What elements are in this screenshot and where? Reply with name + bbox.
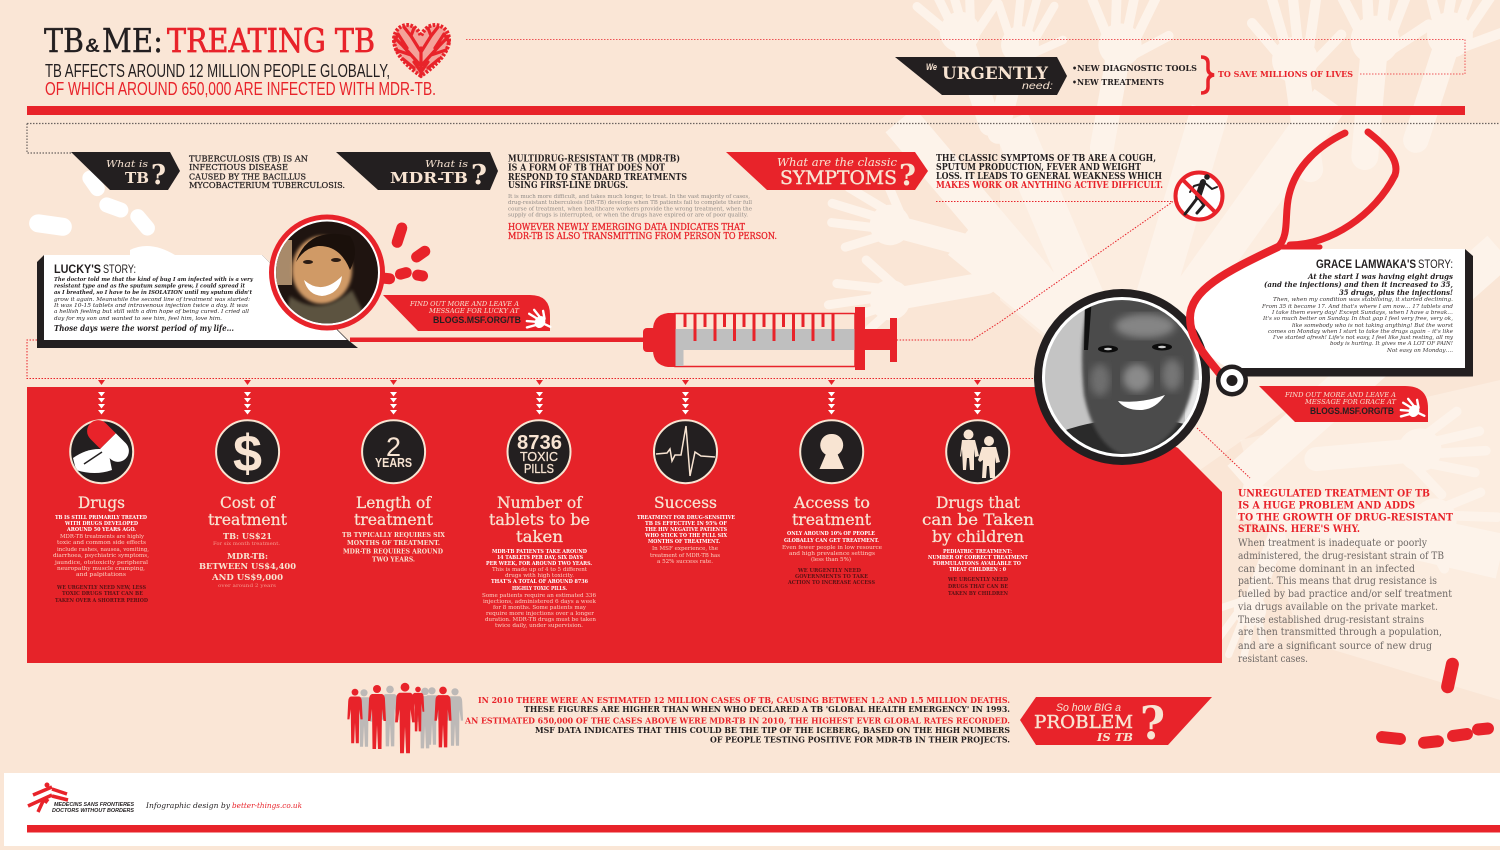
global statistics text: IN 2010 THERE WERE AN ESTIMATED 12 MILLION CASES OF TB, CAUSING BETWEEN 1.2 AND 1.5 MILLION DEATHS. — [478, 696, 1010, 706]
column: number of tablets: duration. MDR-TB drugs must be taken — [485, 617, 596, 623]
column: drugs for children: Drugs that — [936, 493, 1021, 512]
syringe — [643, 307, 897, 370]
column: cost of treatment: BETWEEN US$4,400 — [199, 562, 296, 572]
column: access to treatment — [782, 420, 882, 586]
unregulated treatment text: and are a significant source of new drug — [1238, 640, 1432, 652]
icon: 2 years: 2 — [386, 432, 401, 462]
column: drugs: neuropathy muscle cramping, — [57, 566, 145, 572]
column: drugs: MDR-TB treatments are highly — [60, 534, 145, 540]
column: number of tablets: PER WEEK, FOR AROUND TWO YEARS. — [486, 561, 592, 567]
title: TB — [44, 21, 84, 60]
how big a problem badge: ? — [1140, 696, 1165, 750]
what is TB text: MYCOBACTERIUM TUBERCULOSIS. — [189, 181, 345, 191]
subtitle — [45, 61, 436, 99]
top red rule — [27, 106, 1465, 115]
bottom red pills — [1375, 657, 1495, 749]
unregulated treatment text: When treatment is inadequate or poorly — [1238, 537, 1427, 549]
icon: hand — [524, 306, 555, 336]
column: number of tablets: MDR-TB PATIENTS TAKE AROUND — [492, 549, 587, 555]
column: number of tablets: HIGHLY TOXIC PILLS. — [512, 586, 567, 592]
footer panel: DOCTORS WITHOUT BORDERS — [52, 808, 134, 814]
column: success: WHO STICK TO THE FULL SIX — [644, 533, 728, 539]
stethoscope — [1190, 132, 1396, 396]
column: length of treatment: TWO YEARS. — [372, 556, 415, 564]
column: drugs: AROUND 50 YEARS AGO. — [66, 527, 136, 533]
symptoms badge: ? — [899, 158, 916, 192]
global statistics text: MSF DATA INDICATES THAT THIS COULD BE THE TIP OF THE ICEBERG, BASED ON THE HIGH NUMBERS — [535, 726, 1010, 736]
people silhouettes — [347, 683, 463, 753]
icon: branching heart — [394, 25, 449, 76]
Lucky link button — [383, 295, 555, 336]
what is MDR-TB text: IS A FORM OF TB THAT DOES NOT — [508, 164, 665, 174]
Lucky link button: MESSAGE FOR LUCKY AT — [428, 307, 520, 315]
unregulated treatment text: patient. This means that drug resistance is — [1238, 575, 1437, 587]
Lucky link button: FIND OUT MORE AND LEAVE A — [409, 300, 519, 308]
subtitle: TB AFFECTS AROUND 12 MILLION PEOPLE GLOBALLY, — [45, 61, 390, 81]
column: length of treatment: MDR-TB REQUIRES AROUND — [343, 548, 443, 556]
icon: 8736 toxic pills: 8736 — [517, 432, 562, 454]
arrow chains — [98, 380, 981, 414]
urgently need callout: •NEW DIAGNOSTIC TOOLS — [1072, 64, 1197, 74]
unregulated treatment text: via drugs available on the private market. — [1237, 601, 1438, 613]
column: access to treatment: treatment — [792, 510, 872, 529]
symptoms text: THE CLASSIC SYMPTOMS OF TB ARE A COUGH, — [936, 154, 1156, 164]
red pills — [379, 221, 432, 285]
column: number of tablets: injections, administered 6 days a week — [483, 599, 597, 605]
column: cost of treatment: Cost of — [220, 493, 276, 512]
unregulated treatment text — [1237, 488, 1454, 665]
how big a problem badge: IS TB — [1096, 731, 1133, 744]
Grace link button — [1259, 386, 1429, 425]
Lucky link button: BLOGS.MSF.ORG/TB — [433, 315, 521, 325]
what is TB text: CAUSED BY THE BACILLUS — [189, 172, 306, 182]
Lucky's story panel: LUCKY'S — [54, 262, 101, 276]
column: drugs for children: NUMBER OF CORRECT TREATMENT — [928, 555, 1029, 561]
urgently need callout: URGENTLY — [942, 64, 1049, 84]
what is MDR-TB badge — [336, 152, 498, 191]
Lucky's story panel: Those days were the worst period of my life... — [54, 323, 234, 333]
icon: pills — [70, 416, 133, 483]
what is MDR-TB text — [508, 154, 777, 242]
column: number of tablets — [482, 420, 597, 629]
urgently need callout — [895, 57, 1353, 95]
column: access to treatment: GOVERNMENTS TO TAKE — [795, 574, 868, 580]
what is MDR-TB text: MULTIDRUG-RESISTANT TB (MDR-TB) — [508, 154, 680, 164]
Grace's story panel: STORY: — [1418, 257, 1453, 271]
icon: MSF logo — [28, 782, 68, 812]
Grace's story panel: body is hurting. It gives me A LOT OF PAIN! — [1330, 341, 1453, 347]
what is TB badge — [71, 152, 180, 191]
icon: chestpiece — [1216, 364, 1248, 396]
background hands pattern — [822, 0, 1500, 700]
Grace's story panel: Not easy on Monday…. — [1386, 348, 1453, 354]
column: cost of treatment: TB: US$21 — [223, 532, 272, 542]
column: number of tablets: require more injections over a longer — [486, 611, 594, 617]
Lucky's story panel: The doctor told me that the kind of bug I am infected with is a very — [54, 277, 254, 283]
footer panel — [4, 773, 1500, 846]
title: & — [85, 36, 100, 57]
column: number of tablets: THAT'S A TOTAL OF AROUND 8736 — [491, 579, 588, 585]
Lucky's story panel: resistant type and as the sputum sample grew, I could spread it — [54, 284, 245, 290]
what is MDR-TB text: drug-resistant tuberculosis (DR-TB) develops when TB patients fail to complete their full — [508, 199, 752, 206]
Grace's story panel: Then, when my condition was stabilising, it started declining. — [1273, 297, 1453, 303]
column: drugs for children: PEDIATRIC TREATMENT: — [943, 549, 1012, 555]
what is MDR-TB badge: ? — [471, 160, 487, 191]
column: access to treatment: Access to — [793, 493, 870, 512]
column: success: Success — [654, 493, 717, 512]
column: access to treatment: GLOBALLY CAN GET TREATMENT. — [784, 538, 879, 544]
Lucky's story panel: as I breathed, so I have to be in ISOLATION until my sputum didn't — [54, 290, 252, 296]
column: success: In MSF experience, the — [652, 546, 718, 552]
icon: 8736 toxic pills: TOXIC — [520, 449, 558, 464]
what is TB text: TUBERCULOSIS (TB) IS AN — [189, 154, 309, 164]
icon: dollar: $ — [233, 425, 262, 483]
how big a problem badge: So how BIG a — [1056, 702, 1121, 714]
column: drugs: WE URGENTLY NEED NEW, LESS — [56, 585, 146, 591]
column: number of tablets: twice daily, under supervision. — [495, 623, 583, 629]
dotted connector lines — [27, 40, 1500, 478]
what is TB badge: ? — [151, 160, 166, 191]
column: access to treatment: and high prevalence settings — [789, 551, 875, 557]
column: drugs for children: FORMULATIONS AVAILABLE TO — [933, 561, 1021, 567]
symptoms badge: SYMPTOMS — [780, 167, 897, 189]
what is MDR-TB text: MDR-TB IS ALSO TRANSMITTING FROM PERSON TO PERSON. — [508, 232, 777, 242]
column: access to treatment: (less than 5%) — [811, 556, 851, 563]
column: access to treatment: Even fewer people in low resource — [782, 545, 882, 551]
column: number of tablets: Number of — [497, 493, 583, 512]
icon: no running — [1176, 172, 1222, 220]
column: length of treatment — [342, 420, 446, 564]
symptoms badge: What are the classic — [777, 156, 897, 169]
what is TB text: INFECTIOUS DISEASE — [189, 163, 288, 173]
column: drugs for children: by children — [932, 527, 1024, 546]
column: drugs for children: WE URGENTLY NEED — [947, 577, 1008, 583]
column: access to treatment: WE URGENTLY NEED — [797, 568, 861, 574]
Grace's story panel: (and the injections) and then it increased to 35, — [1264, 280, 1453, 289]
column: cost of treatment: For six month treatment. — [213, 541, 280, 547]
unregulated treatment text: administered, the drug-resistant strain of TB — [1238, 550, 1444, 562]
footer panel: Infographic design by — [145, 802, 231, 810]
icon: keyhole — [800, 420, 863, 483]
what is MDR-TB text: course of treatment, when healthcare workers provide the wrong treatment, when the — [508, 206, 752, 212]
column: drugs: jaundice, ototoxicity peripheral — [54, 560, 148, 566]
icon: 8736 toxic pills — [508, 420, 570, 483]
icon: 8736 toxic pills: PILLS — [524, 461, 554, 476]
Lucky's story panel: day for my son and wanted to see him, feel him, love him. — [54, 316, 222, 322]
unregulated treatment text: resistant cases. — [1238, 653, 1308, 665]
symptoms text — [936, 154, 1163, 191]
column: drugs: diarrhoea, psychiatric symptoms, — [53, 553, 149, 559]
symptoms text: LOSS. IT LEADS TO GENERAL WEAKNESS WHICH — [936, 172, 1162, 182]
column: cost of treatment — [199, 420, 296, 589]
column: drugs: and palpitations — [76, 572, 126, 578]
column: cost of treatment: MDR-TB: — [227, 552, 268, 562]
white pills — [28, 168, 175, 255]
column: number of tablets: taken — [516, 527, 563, 546]
Grace's story panel: It's so much better on Sunday. In that gap I feel very free, very ok, — [1262, 316, 1453, 322]
what is MDR-TB badge: What is — [425, 159, 468, 170]
column: number of tablets: for 8 months. Some patients may — [493, 605, 587, 611]
what is TB text — [189, 154, 345, 191]
Grace link button: BLOGS.MSF.ORG/TB — [1310, 406, 1394, 416]
column: number of tablets: 14 TABLETS PER DAY, SIX DAYS — [497, 555, 583, 561]
column: length of treatment: TB TYPICALLY REQUIRES SIX — [342, 531, 446, 539]
column: drugs: TB IS STILL PRIMARILY TREATED — [55, 515, 147, 521]
Grace link button: FIND OUT MORE AND LEAVE A — [1284, 391, 1396, 399]
unregulated treatment text: IS A HUGE PROBLEM AND ADDS — [1238, 500, 1415, 512]
what is TB badge: What is — [106, 159, 148, 170]
title — [44, 21, 375, 60]
column: cost of treatment: AND US$9,000 — [211, 573, 283, 583]
column: success: THE HIV NEGATIVE PATIENTS — [645, 527, 727, 533]
column: success — [637, 420, 735, 565]
what is MDR-TB text: HOWEVER NEWLY EMERGING DATA INDICATES THAT — [508, 223, 745, 233]
column: drugs for children: can be Taken — [922, 510, 1034, 529]
Grace's story panel: From 35 it became 17. And that's where I am now… 17 tablets and — [1261, 304, 1453, 310]
Lucky's story panel: grow it again. Meanwhile the second line of treatment was started: — [54, 297, 250, 303]
unregulated treatment text: are then transmitted through a population, — [1238, 626, 1442, 638]
global statistics text: AN ESTIMATED 650,000 OF THE CASES ABOVE WERE MDR-TB IN 2010, THE HIGHEST EVER GLOBAL RATES RECORDED. — [464, 716, 1010, 726]
column: length of treatment: treatment — [354, 510, 434, 529]
column: number of tablets: This is made up of 4 to 5 different — [492, 567, 588, 573]
red treatment panel — [27, 387, 1222, 663]
column: access to treatment: ACTION TO INCREASE ACCESS — [787, 580, 875, 586]
icon: children — [946, 420, 1009, 483]
column: success: TREATMENT FOR DRUG-SENSITIVE — [637, 515, 735, 521]
Grace's story panel: 35 drugs, plus the injections! — [1339, 288, 1453, 297]
icon: hand — [1398, 395, 1429, 425]
Grace link button: MESSAGE FOR GRACE AT — [1304, 398, 1397, 406]
what is TB badge: TB — [125, 169, 149, 187]
column: drugs: TAKEN OVER A SHORTER PERIOD — [55, 598, 148, 604]
what is MDR-TB text: USING FIRST-LINE DRUGS. — [508, 181, 628, 191]
global statistics text — [464, 696, 1010, 746]
global statistics text: OF PEOPLE TESTING POSITIVE FOR MDR-TB IN THEIR PROJECTS. — [710, 736, 1010, 746]
Grace's story panel — [1190, 249, 1473, 376]
column: length of treatment: Length of — [356, 493, 432, 512]
icon: heartbeat — [654, 420, 717, 483]
column: number of tablets: Some patients require an estimated 336 — [482, 593, 597, 599]
column: number of tablets: tablets to be — [489, 510, 590, 529]
column: drugs: toxic and common side effects — [57, 540, 146, 546]
Lucky's story panel: a hellish feeling but still with a dim hope of being cured. I cried all — [54, 309, 249, 315]
unregulated treatment text: TO THE GROWTH OF DRUG-RESISTANT — [1238, 512, 1454, 524]
column: number of tablets: drugs with high toxicity. — [505, 573, 574, 579]
column: success: treatment of MDR-TB has — [650, 553, 720, 559]
unregulated treatment text: can become dominant in an infected — [1238, 563, 1415, 575]
column: drugs for children: TREAT CHILDREN : 0 — [949, 567, 1006, 573]
Grace's story panel: At the start I was having eight drugs — [1307, 272, 1454, 281]
urgently need callout: TO SAVE MILLIONS OF LIVES — [1218, 70, 1353, 80]
column: drugs — [53, 416, 149, 604]
what is MDR-TB badge: MDR-TB — [390, 169, 468, 187]
column: length of treatment: MONTHS OF TREATMENT. — [347, 539, 440, 547]
column: drugs: include rashes, nausea, vomiting, — [57, 547, 149, 553]
icon: 2 years: YEARS — [375, 455, 412, 470]
column: access to treatment: ONLY AROUND 10% OF PEOPLE — [787, 531, 875, 537]
urgently need callout: •NEW TREATMENTS — [1072, 78, 1164, 88]
title: ME: — [102, 21, 163, 60]
symptoms badge — [726, 152, 928, 192]
what is MDR-TB text: It is much more difficult, and takes much longer, to treat. In the vast majority of cases, — [508, 194, 750, 200]
unregulated treatment text: These established drug-resistant strains — [1238, 614, 1424, 626]
Lucky's story panel: STORY: — [103, 262, 136, 276]
icon: brace — [1201, 57, 1214, 93]
unregulated treatment text: fuelled by bad practice and/or self treatment — [1238, 588, 1453, 600]
Grace photo — [1034, 289, 1210, 470]
what is MDR-TB text: RESPOND TO STANDARD TREATMENTS — [508, 173, 687, 183]
column: drugs for children: TAKEN BY CHILDREN — [948, 591, 1008, 597]
Grace's story panel: I take them every day! Except Sundays, when I have a break… — [1271, 310, 1453, 316]
column: cost of treatment: over around 2 years — [218, 583, 276, 589]
icon: dollar — [216, 420, 279, 483]
urgently need callout: We — [926, 62, 937, 72]
column: drugs: TOXIC DRUGS THAT CAN BE — [62, 591, 143, 597]
Grace's story panel: comes on Monday when I start to take the drugs again – it's like — [1268, 329, 1454, 335]
Grace's story panel: GRACE LAMWAKA'S — [1316, 257, 1416, 271]
column: drugs for children — [922, 420, 1034, 597]
Lucky photo — [269, 214, 385, 330]
column: drugs for children: DRUGS THAT CAN BE — [948, 584, 1008, 590]
Grace's story panel: like somebody who is not taking anything! But the worst — [1292, 323, 1454, 329]
column: drugs: WITH DRUGS DEVELOPED — [64, 521, 138, 527]
symptoms text: SPUTUM PRODUCTION, FEVER AND WEIGHT — [936, 163, 1141, 173]
how big a problem badge: PROBLEM — [1034, 712, 1133, 733]
what is MDR-TB text: supply of drugs is interrupted, or when the drugs have expired or are of poor quality. — [508, 212, 748, 218]
Lucky's story panel: It was 10-15 tablets and intravenous injection twice a day. It was — [53, 303, 248, 309]
how big a problem badge — [1020, 696, 1212, 750]
icon: 2 years — [362, 420, 425, 483]
title: TREATING TB — [167, 21, 375, 60]
column: cost of treatment: treatment — [208, 510, 288, 529]
column: success: MONTHS OF TREATMENT. — [648, 539, 720, 545]
global statistics text: THESE FIGURES ARE HIGHER THAN WHEN WHO DECLARED A TB 'GLOBAL HEALTH EMERGENCY' IN 1993. — [524, 705, 1010, 715]
footer panel: MEDECINS SANS FRONTIERES — [54, 802, 134, 808]
urgently need callout: need: — [1022, 81, 1053, 92]
column: success: a 52% success rate. — [657, 559, 713, 565]
column: success: TB IS EFFECTIVE IN 95% OF — [645, 521, 727, 527]
Grace's story panel: I've started afresh! Life's not easy, I feel like just resting, all my — [1272, 335, 1454, 341]
symptoms text: MAKES WORK OR ANYTHING ACTIVE DIFFICULT. — [936, 181, 1163, 191]
Lucky's story panel — [37, 255, 645, 348]
subtitle: OF WHICH AROUND 650,000 ARE INFECTED WITH MDR-TB. — [45, 79, 436, 99]
unregulated treatment text: STRAINS. HERE'S WHY. — [1238, 524, 1360, 535]
unregulated treatment text: UNREGULATED TREATMENT OF TB — [1238, 488, 1430, 500]
footer panel: better-things.co.uk — [232, 802, 302, 810]
column: drugs: Drugs — [78, 493, 125, 512]
